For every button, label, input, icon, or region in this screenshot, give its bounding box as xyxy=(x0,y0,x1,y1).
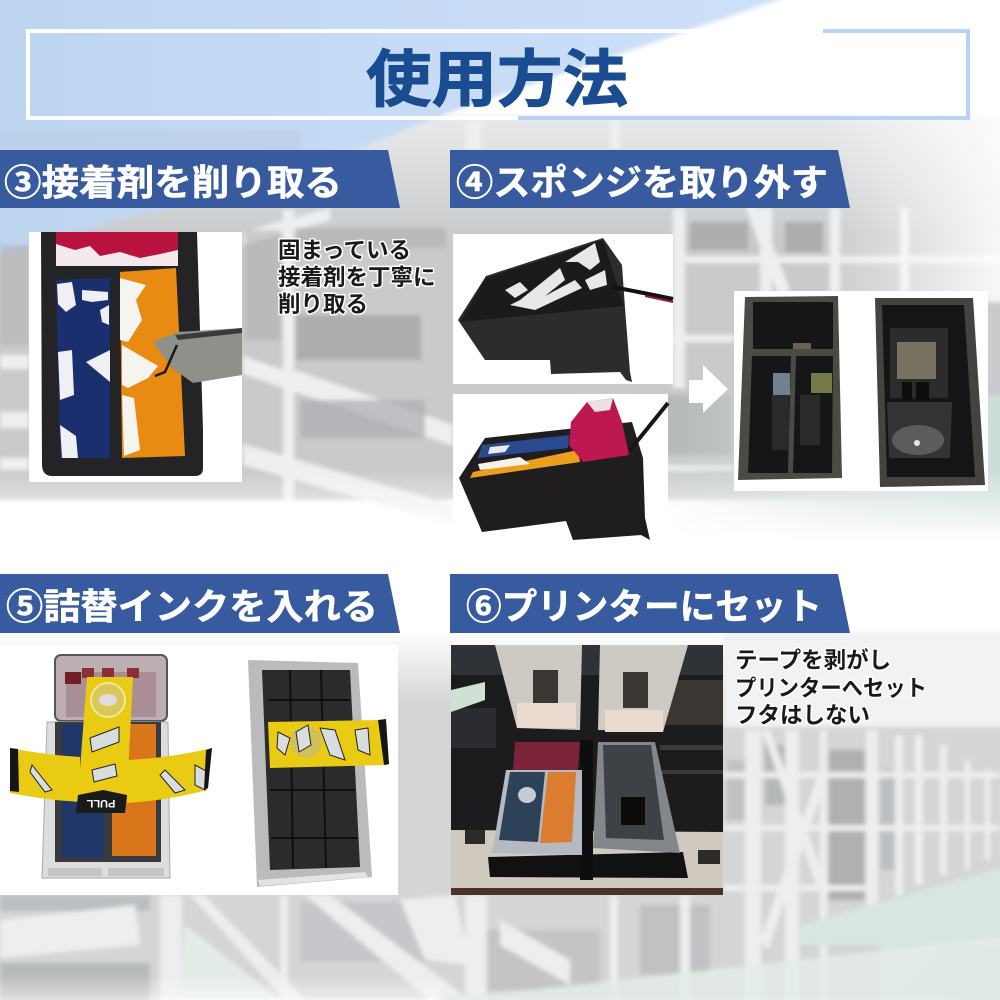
black cartridge xyxy=(593,742,680,853)
yellow pull tapes: PULL xyxy=(86,797,115,809)
heading banner: step 5 xyxy=(0,574,400,633)
right empty cartridge xyxy=(875,298,985,487)
photo: cartridges set in printer xyxy=(451,645,723,895)
yellow tape on black cartridge xyxy=(268,719,389,768)
heading banner: step 3 xyxy=(0,150,400,208)
photo: refill ink cartridges with tape xyxy=(0,645,398,895)
text block: step 3 note xyxy=(278,238,436,317)
arrow xyxy=(689,365,728,413)
cartridge holder xyxy=(488,852,688,878)
printer floor xyxy=(451,830,723,888)
text block: step 3 note: 固まっている xyxy=(278,238,411,263)
heading banner: step 4: ④スポンジを取り外す xyxy=(456,162,828,203)
heading banner: step 6 xyxy=(450,574,850,633)
heading banner: step 3: ③接着剤を削り取る xyxy=(4,162,342,203)
right black cartridge xyxy=(248,660,372,887)
text block: step 6 note xyxy=(735,647,927,728)
text block: step 6 note: テープを剥がし xyxy=(735,647,891,673)
left colour cartridge xyxy=(42,655,170,878)
title frame xyxy=(28,31,968,118)
text block: step 3 note: 削り取る xyxy=(278,292,368,317)
heading banner: step 5: ⑤詰替インクを入れる xyxy=(6,586,378,627)
photo: cartridge with foam in place xyxy=(453,234,673,384)
left empty cartridge xyxy=(738,296,842,480)
photo: scraping adhesive xyxy=(29,232,242,482)
yellow pull tapes xyxy=(10,677,212,813)
title: 使用方法 xyxy=(366,46,628,115)
photo: lifting magenta foam out xyxy=(453,394,668,554)
colour cartridge xyxy=(513,742,580,770)
heading banner: step 4 xyxy=(450,150,850,208)
text block: step 6 note: フタはしない xyxy=(735,703,870,728)
text block: step 3 note: 接着剤を丁寧に xyxy=(278,265,436,290)
photo: emptied cartridges xyxy=(734,291,988,491)
cover arms xyxy=(495,645,582,730)
heading banner: step 6: ⑥プリンターにセット xyxy=(466,586,822,627)
text block: step 6 note: プリンターへセット xyxy=(735,676,927,701)
